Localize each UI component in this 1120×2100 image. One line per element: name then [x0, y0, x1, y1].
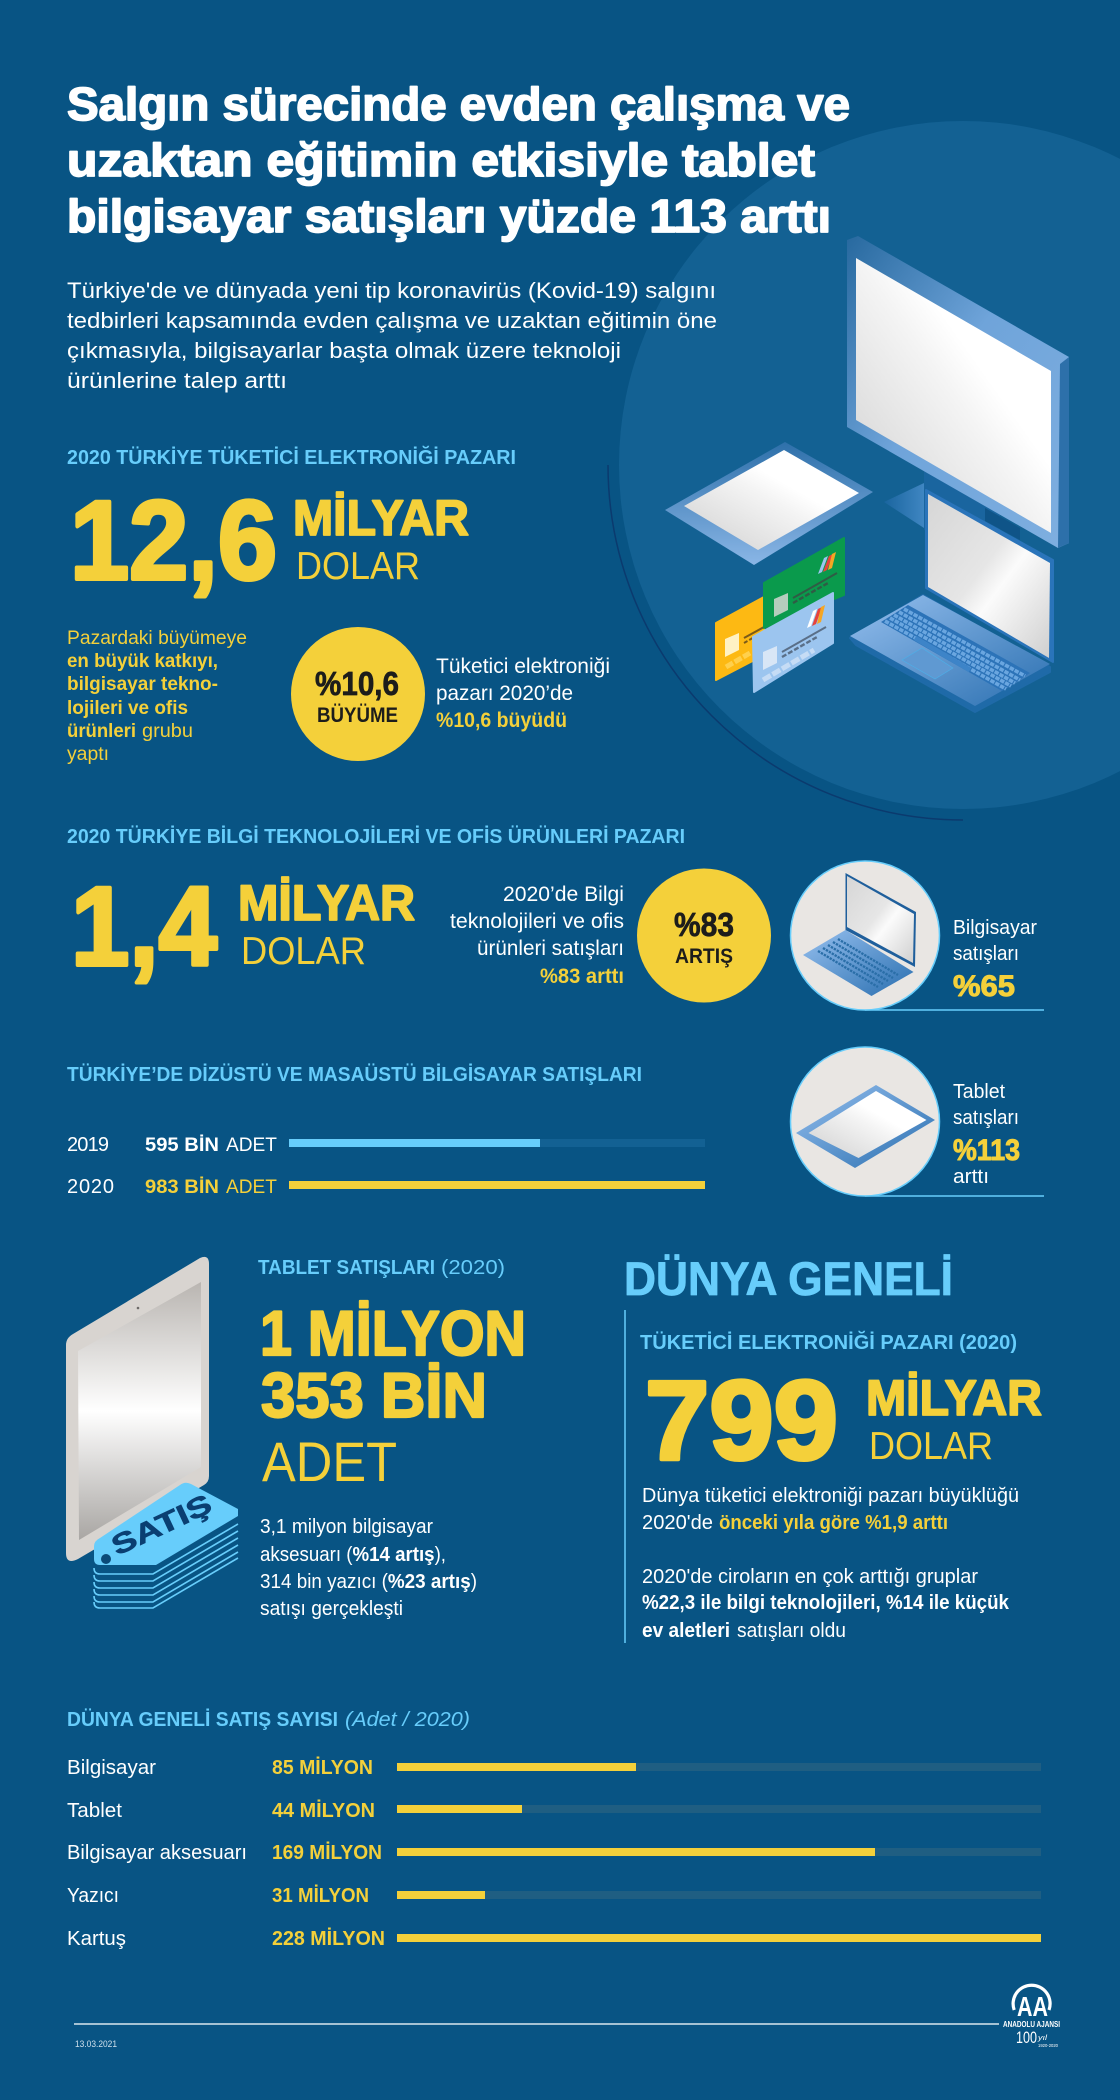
- text: biggest contribution: bilgisayar tekno-: [67, 674, 218, 695]
- big number: 1,4 milyar dolar: DOLAR: [241, 930, 366, 973]
- text: IT sales rose: %83 arttı: [540, 965, 624, 988]
- big number: 12,6 milyar dolar: [70, 478, 469, 603]
- badge: %83 artış: %83: [674, 906, 734, 943]
- icon: sales tag stack: SATIŞ: [106, 1488, 217, 1561]
- big number: 799 milyar dolar: 799: [645, 1358, 838, 1483]
- icon: credit cards: [716, 538, 844, 692]
- text: tablet sales %113: %113: [953, 1134, 1020, 1167]
- row: 2020 laptop and desktop sales: [67, 1176, 705, 1198]
- intro text: [67, 278, 717, 393]
- text: biggest contribution: lojileri ve ofis: [67, 698, 188, 719]
- text: market size grew: 2020'de: [642, 1512, 713, 1534]
- text: computer sales %65: %65: [953, 970, 1015, 1003]
- text: market size grew: önceki yıla göre %1,9 arttı: [719, 1512, 948, 1534]
- text: biggest contribution: grubu: [142, 721, 193, 742]
- subheading: market 2020: TÜKETİCİ ELEKTRONİĞİ PAZARI (2020): [640, 1330, 1017, 1354]
- text: IT sales rose: 2020’de Bilgi: [503, 883, 624, 906]
- illustration: tablet with sales tag: [66, 1257, 238, 1608]
- circle icon: tablet: [790, 1047, 1044, 1196]
- text: tablet sales %113: arttı: [953, 1166, 989, 1188]
- big number: 1,4 milyar dolar: [71, 864, 415, 989]
- text: IT sales rose: teknolojileri ve ofis: [450, 910, 624, 933]
- bar row: accessories: 169 MİLYON: [272, 1841, 382, 1864]
- row: 2019 laptop and desktop sales: ADET: [226, 1135, 277, 1156]
- icon: tablet: [66, 1257, 209, 1561]
- bar row: printer: 31 MİLYON: [272, 1884, 369, 1907]
- yellow card: [716, 597, 764, 680]
- text: biggest contribution: en büyük katkıyı,: [67, 651, 218, 672]
- bar row: printer: [67, 1884, 1041, 1907]
- text: computer sales %65: Bilgisayar: [953, 917, 1037, 939]
- heading: worldwide: DÜNYA GENELİ: [624, 1252, 953, 1305]
- badge: %83 artış: ARTIŞ: [675, 945, 733, 968]
- bar row: tablet: [67, 1799, 1041, 1822]
- big number: 799 milyar dolar: MİLYAR: [866, 1370, 1042, 1426]
- text: market grew: pazarı 2020’de: [436, 682, 573, 705]
- logo: Anadolu Ajansı: ANADOLU AJANSI: [1003, 2019, 1060, 2029]
- text: IT sales rose: ürünleri satışları: [477, 937, 624, 960]
- green card: [764, 538, 844, 628]
- bar row: tablet: Tablet: [67, 1800, 122, 1822]
- badge: %10,6 büyüme: %10,6: [315, 665, 399, 702]
- big number: 1 milyon 353 bin adet: 353 BİN: [261, 1361, 487, 1431]
- logo: Anadolu Ajansı: yıl: [1037, 2035, 1048, 2042]
- text: accessories and printers: 314 bin yazıcı (%23 artış): [260, 1571, 477, 1593]
- intro text: çıkmasıyla, bilgisayarlar başta olmak üzere teknoloji: [67, 338, 621, 363]
- big number: 1 milyon 353 bin adet: [260, 1299, 526, 1493]
- text: market grew: %10,6 büyüdü: [436, 709, 567, 732]
- heading: worldwide unit sales: (Adet / 2020): [345, 1709, 470, 1731]
- bar row: computer: [67, 1756, 1041, 1779]
- text: accessories and printers: satışı gerçekleşti: [260, 1598, 403, 1620]
- bar row: tablet: 44 MİLYON: [272, 1799, 375, 1822]
- intro text: tedbirleri kapsamında evden çalışma ve uzaktan eğitimin öne: [67, 308, 717, 333]
- icon: laptop: [850, 490, 1053, 712]
- intro text: Türkiye'de ve dünyada yeni tip koronavirüs (Kovid-19) salgını: [67, 278, 716, 303]
- big number: 1 milyon 353 bin adet: 1 MİLYON: [260, 1299, 526, 1369]
- circle icon: laptop: [790, 861, 1044, 1010]
- big number: 12,6 milyar dolar: DOLAR: [296, 545, 420, 588]
- logo: Anadolu Ajansı: AA: [1017, 1991, 1048, 2022]
- text: fastest growing groups: 2020'de ciroların en çok arttığı gruplar: [642, 1566, 978, 1588]
- blue card: [753, 593, 833, 692]
- title: uzaktan eğitimin etkisiyle tablet: [67, 134, 815, 186]
- text: computer sales %65: satışları: [953, 943, 1019, 965]
- text: market grew: [436, 655, 610, 732]
- heading: tablet sales 2020: (2020): [441, 1257, 505, 1279]
- section heading: Türkiye consumer electronics market: 2020 TÜRKİYE TÜKETİCİ ELEKTRONİĞİ PAZARI: [67, 445, 516, 469]
- big number: 799 milyar dolar: [645, 1358, 1042, 1483]
- bar row: accessories: [67, 1841, 1041, 1864]
- footer rule and date: 13.03.2021: [75, 2039, 117, 2049]
- illustration: devices: [665, 236, 1069, 712]
- bar row: accessories: Bilgisayar aksesuarı: [67, 1842, 247, 1864]
- heading: worldwide unit sales: DÜNYA GENELİ SATIŞ SAYISI: [67, 1708, 338, 1731]
- bar row: cartridge: [67, 1927, 1041, 1950]
- text: market size grew: [642, 1485, 1019, 1534]
- text: fastest growing groups: satışları oldu: [737, 1620, 846, 1642]
- row: 2020 laptop and desktop sales: 983 BİN: [145, 1177, 219, 1198]
- text: accessories and printers: 3,1 milyon bilgisayar: [260, 1516, 433, 1538]
- big number: 12,6 milyar dolar: MİLYAR: [293, 490, 469, 546]
- text: accessories and printers: [260, 1516, 477, 1620]
- logo: Anadolu Ajansı: 1920-2020: [1038, 2043, 1058, 2048]
- text: computer sales %65: [953, 917, 1037, 1003]
- badge: %83 artış: [637, 868, 771, 1002]
- bar row: printer: Yazıcı: [67, 1885, 119, 1907]
- section heading: laptop and desktop sales: TÜRKİYE’DE DİZÜSTÜ VE MASAÜSTÜ BİLGİSAYAR SATIŞLARI: [67, 1063, 642, 1086]
- title: [67, 78, 850, 242]
- text: biggest contribution: yaptı: [67, 744, 109, 765]
- text: biggest contribution: Pazardaki büyümeye: [67, 628, 247, 649]
- big number: 12,6 milyar dolar: 12,6: [70, 478, 277, 603]
- heading: worldwide unit sales: [67, 1708, 470, 1731]
- section heading: IT and office products market: 2020 TÜRKİYE BİLGİ TEKNOLOJİLERİ VE OFİS ÜRÜNLERİ PAZARI: [67, 825, 685, 848]
- row: 2020 laptop and desktop sales: ADET: [226, 1177, 277, 1198]
- row: 2019 laptop and desktop sales: [67, 1134, 705, 1156]
- badge: %10,6 büyüme: BÜYÜME: [317, 704, 398, 727]
- text: IT sales rose: [450, 883, 624, 988]
- text: fastest growing groups: %22,3 ile bilgi teknolojileri, %14 ile küçük: [642, 1592, 1010, 1614]
- bar row: cartridge: Kartuş: [67, 1928, 126, 1950]
- heading: tablet sales 2020: TABLET SATIŞLARI: [258, 1257, 435, 1279]
- title: bilgisayar satışları yüzde 113 arttı: [67, 190, 831, 242]
- title: Salgın sürecinde evden çalışma ve: [67, 78, 850, 130]
- text: tablet sales %113: Tablet: [953, 1081, 1005, 1103]
- bar row: cartridge: 228 MİLYON: [272, 1927, 385, 1950]
- text: biggest contribution: [67, 628, 247, 765]
- text: tablet sales %113: satışları: [953, 1107, 1019, 1129]
- text: tablet sales %113: [953, 1081, 1020, 1188]
- decorative circle behind devices: [608, 121, 1120, 820]
- text: market size grew: Dünya tüketici elektroniği pazarı büyüklüğü: [642, 1485, 1019, 1507]
- text: market grew: Tüketici elektroniği: [436, 655, 610, 678]
- bar row: computer: Bilgisayar: [67, 1757, 156, 1779]
- text: fastest growing groups: ev aletleri: [642, 1620, 730, 1642]
- big number: 1,4 milyar dolar: 1,4: [71, 864, 217, 989]
- panel: worldwide consumer electronics market: [625, 1310, 1042, 1643]
- logo: Anadolu Ajansı: 100: [1016, 2028, 1037, 2047]
- bar row: computer: 85 MİLYON: [272, 1756, 373, 1779]
- intro text: ürünlerine talep arttı: [67, 368, 287, 393]
- row: 2019 laptop and desktop sales: 595 BİN: [145, 1135, 219, 1156]
- row: 2020 laptop and desktop sales: 2020: [67, 1176, 114, 1198]
- logo: Anadolu Ajansı: [1003, 1985, 1060, 2048]
- big number: 1,4 milyar dolar: MİLYAR: [238, 875, 415, 931]
- text: fastest growing groups: [642, 1566, 1010, 1642]
- badge: %10,6 büyüme: [291, 627, 425, 761]
- big number: 1 milyon 353 bin adet: ADET: [262, 1430, 397, 1493]
- icon: tablet: [665, 442, 873, 565]
- icon: monitor: [847, 236, 1069, 548]
- text: accessories and printers: aksesuarı (%14 artış),: [260, 1544, 446, 1566]
- big number: 799 milyar dolar: DOLAR: [869, 1425, 993, 1468]
- text: biggest contribution: ürünleri: [67, 721, 136, 742]
- row: 2019 laptop and desktop sales: 2019: [67, 1134, 109, 1156]
- icon: sales tag stack: [94, 1483, 238, 1608]
